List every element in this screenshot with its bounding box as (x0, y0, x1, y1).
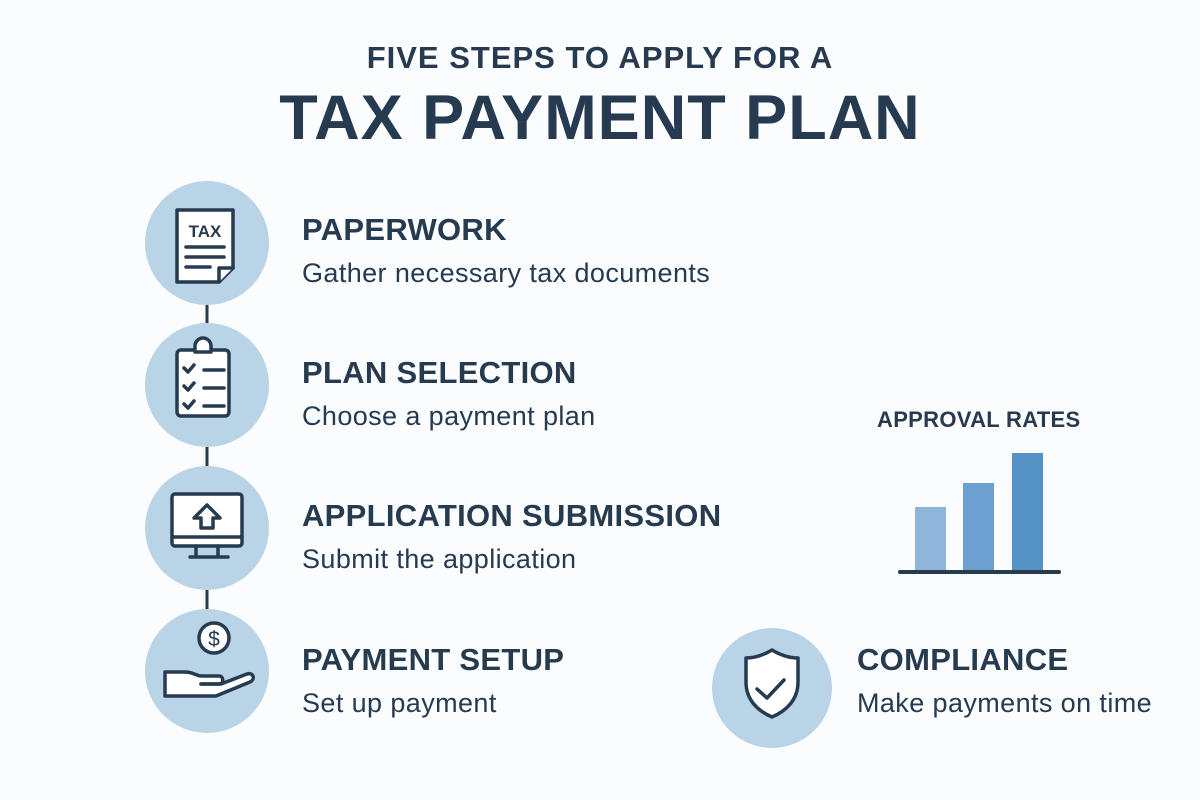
icon: tax document: TAX (189, 222, 222, 241)
icon: tax document (145, 181, 269, 305)
step 4 text: PAYMENT SETUP (302, 642, 564, 677)
step 5 text: Make payments on time (857, 688, 1152, 718)
step 2 text (302, 355, 596, 431)
step 3 text (302, 498, 721, 574)
step 1 text (302, 212, 710, 288)
step 2 text: PLAN SELECTION (302, 355, 577, 390)
bar chart (898, 453, 1061, 574)
step 1 text: Gather necessary tax documents (302, 258, 710, 288)
step 3 text: APPLICATION SUBMISSION (302, 498, 721, 533)
icon: shield (712, 628, 832, 748)
step 5 text (857, 642, 1152, 718)
title (279, 40, 921, 153)
step 5 text: COMPLIANCE (857, 642, 1068, 677)
icon: monitor upload (145, 466, 269, 590)
step 2 text: Choose a payment plan (302, 401, 596, 431)
step 4 text: Set up payment (302, 688, 497, 718)
icon: clipboard (145, 323, 269, 447)
step 4 text (302, 642, 564, 718)
step 3 text: Submit the application (302, 544, 576, 574)
title: TAX PAYMENT PLAN (279, 83, 921, 153)
title: FIVE STEPS TO APPLY FOR A (367, 40, 833, 75)
chart title: APPROVAL RATES (877, 407, 1080, 432)
icon: hand with coin: $ (208, 628, 220, 651)
icon: hand with coin (145, 609, 269, 733)
step 1 text: PAPERWORK (302, 212, 507, 247)
